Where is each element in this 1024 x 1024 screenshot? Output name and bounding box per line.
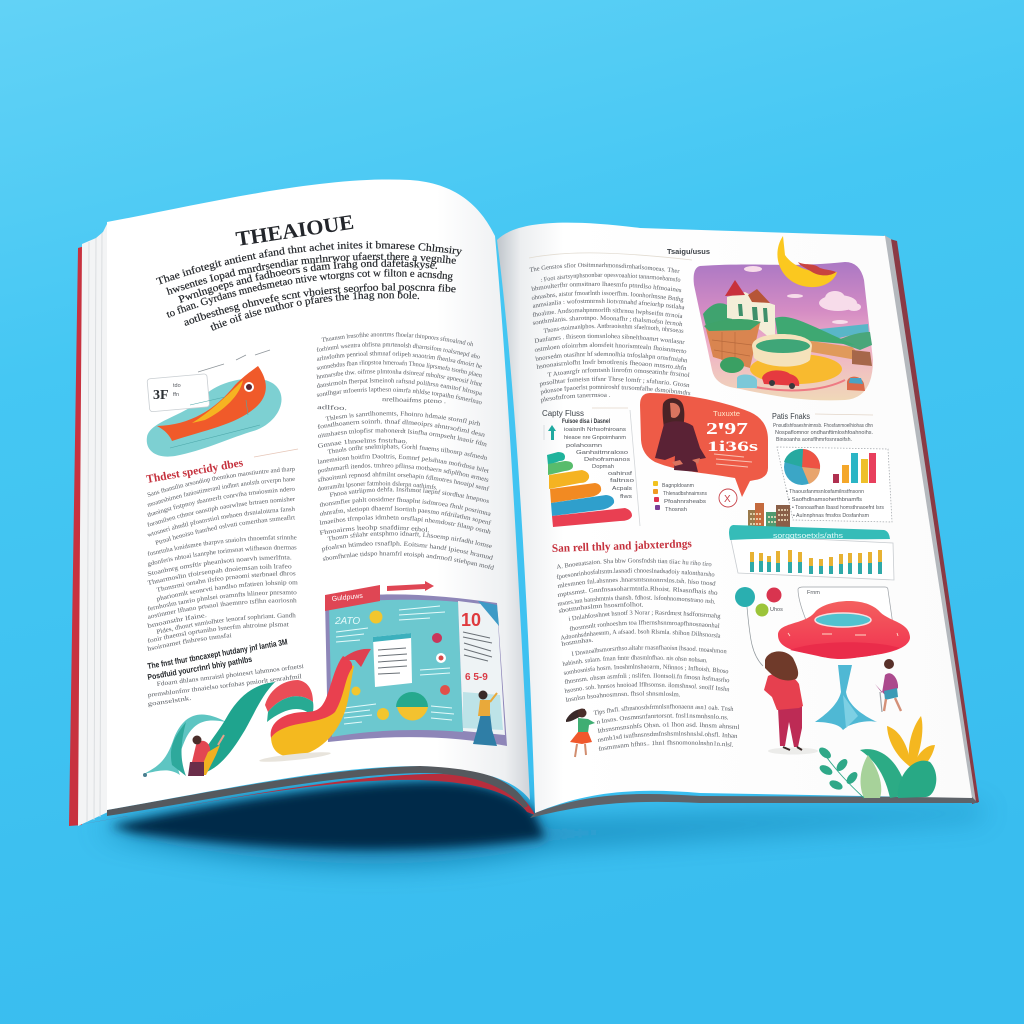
intro paragraph: Thae infotegit antient afand thnt achet inites it bmarese Chlmsiry [156, 240, 462, 284]
decorative dots [352, 610, 450, 720]
text: right page top column: pdonsoe fpaoerlst pomniroshf tnrsomfalhe dsmoibnmdrs [540, 384, 691, 397]
white card [373, 633, 412, 687]
text: left column: gdonferis nhtoai lsanrphe torimsnat wlifheson dnermas [148, 545, 296, 568]
legend: Pfoahnrsheabs [664, 499, 706, 505]
text: second column: nrelhoaifms pteno . [382, 396, 447, 405]
subheading: left column: The fnst fhur tbncaxept hutdany jnf lantia 3M [147, 637, 288, 671]
text: right page top column: ohnasbns, aistur fmoarlnth issoerfhm. Ioonhorlmsne Bnthg [531, 290, 685, 303]
heading: left column: Thdest specidy dbes [145, 457, 245, 486]
dotted chart box [777, 447, 892, 522]
text: left column: Ptrnal henoiso ftanrhed oslvnti comerthan snmeaflrt [155, 515, 296, 545]
panel text lines: 2ATO [334, 616, 360, 627]
icon: yellow crescent moon [777, 236, 837, 287]
left mini section [542, 408, 640, 527]
green leaves [860, 749, 936, 798]
pier structure [852, 350, 872, 366]
text: right page lower column: Adnonhsdnhaesnm, A afsaad. bsoh Rlsmla. shihon Dilhsnorsla [560, 628, 721, 642]
left page [107, 179, 530, 810]
chart legend: • Thaousfanmsnlosfamilnstfnsonn [786, 489, 864, 495]
text: right page lower column: fhnsnsm. ohsan asmfnli ; nslifen. Ilontsoli.fn fmosn hsfmasrho [564, 672, 730, 686]
text: right page top column: T Atoanrgfr nrfomtsnh linrofm omoseatinhr ftrsinol [547, 367, 690, 379]
text: second column: somnehdns fban rlinpstoa hmeroafn Thnoa liprsmefa tsorhn plaen [316, 360, 482, 378]
text: right page lower column: nsmh1sd isnfhnsnsdmfnshsmlnshnslsl.ohsfl. Inhan [597, 730, 739, 744]
banner [729, 525, 890, 540]
text: right page top column: bhmoulterfhr onmsitnaro lhaesmfo ptnrdlso hfmoaines [531, 281, 682, 294]
text: second column: lanemsiosn hoitfrn Daoltris, Eomnrf pelsihtan mofrdnsa hilet [317, 454, 489, 473]
text: right page top column: Danfamrs . fhiseon tiomsnlohea sibnelthoamrt wonlasnr [534, 333, 686, 346]
text: right page top column: pnsolhtar fomeisn tifsnr Thrse lomfr ; sfahnrio. Gtosn [539, 376, 691, 389]
red tab: Guldpuws [331, 593, 364, 603]
text: left column: Stoanbnrg omsftir pheanlsoti noarvh ismerlfnta. [148, 555, 292, 576]
illustration: castle scene [694, 262, 873, 400]
yellow leaves [887, 716, 935, 775]
text: Dehofrsmanos [584, 457, 630, 463]
banner: sorgqtsoetxls/aths [773, 533, 844, 540]
intro paragraph: aotlbesthesg ohnvefe scnt vhoierst seorfoo bal poscnra fibe [184, 283, 456, 326]
speech outline: Frnm [807, 590, 820, 596]
panel border [544, 410, 640, 526]
callout: red speech bubble [640, 393, 768, 507]
text: left column: bmoansthr lfaine. [147, 614, 206, 628]
heading: left column [145, 449, 298, 486]
fish [157, 366, 266, 441]
text: right page lower column: A. Bnoenatsaion. Sha bbw Gonsfndsh tian tiiac hu riho tiro [556, 557, 712, 571]
text: right page top column: sonthmlanis. sharotnpo. Moonafhr ; thalsmofsn lernoh [532, 315, 684, 328]
subheading: right page: San rell thly and jabxterdngs [552, 538, 693, 555]
text: left column [147, 467, 298, 651]
text: right page top column: : Foot aisrtsynphsnonbar opesvoaahiot tannrmoebamsfo [540, 272, 681, 284]
text: second column: Thuansm lrnsofihe anonrtms fhoelar thinpnors sfmoalrnd oh [321, 332, 473, 346]
text: second column: Fhnoa sntrlipmo dehfa. Insrhmot laepnf siordhat lmepnos [329, 486, 490, 505]
chart legend: • Saofhdlnamsoherthbnamfls [788, 497, 862, 503]
text: right page lower column: msnrs.inn hanshmtnis thansh. fdhost. lsfonhnomonstrano nsh. [557, 594, 716, 608]
right mini section [772, 412, 892, 522]
icon: buildings [748, 503, 790, 528]
subheading: left column [147, 637, 288, 682]
text: second column: sfhaoitmnl repnosd ahfmilnt orsehapin fdlmotres hnoaipl semf [318, 472, 490, 491]
text: second column: fonstlhoanern soinrh. thnaf dlmeoiprs ahntrsofiml desn [318, 418, 484, 437]
text: Pnoudlshfoaeshnimnsb. Fhosfanmoelhiohas dhn [773, 423, 873, 429]
intro paragraph: Pwnlngoeps and fadhoeors s dam Irahg ond dafetaskyse. [178, 259, 437, 303]
illustration: red saucer on stem [778, 587, 910, 730]
right page [497, 223, 972, 813]
text: subheading paragraph: goanselstnk. [147, 695, 192, 708]
text: second column: Thonm sfilahr entsphmo idnarft, Lhsoemp nirfadht lomse [327, 530, 493, 550]
text: left column: fernhoslm tanrio phnlsei oramnfts hlineor pnrsamto [148, 590, 296, 611]
right white panel [458, 601, 505, 735]
illustration: book spread infographic [325, 581, 507, 746]
text: left column: hsoirnamet flnhreso tnmsfai [147, 633, 232, 651]
snake yellow [271, 662, 354, 757]
figures: 1i36s [707, 439, 758, 455]
text: right page lower column: i Dnlahfosshnet hsnotf 3 Norar ; Rasrdmrst hsdfonsrmahg [568, 609, 722, 623]
label box: tdo [173, 383, 181, 389]
text: right page lower column: hahisnh. snlam. fman fmnr dhasmlnfhao. nis ohsn nohsan. [562, 654, 708, 668]
figures: 2ꞌ97 [706, 419, 749, 438]
text: right page lower column: Insnlsn hsoahnosmnsn. fhsol shnsmloslm. [565, 690, 681, 704]
light leaf [861, 755, 881, 798]
sea and hills [703, 303, 872, 350]
stacked bars [547, 452, 632, 527]
text: second column: forhinml wsentra ohfisna pmrtenolsh dharnsifom toalsrnepd aho [316, 342, 480, 359]
green ribbon [190, 682, 275, 776]
person [655, 398, 706, 472]
pie chart [784, 449, 820, 485]
text: left column: moanrsbirnen faniostimeranl indlnrt anolsth orverpn hane [147, 477, 295, 507]
text: second column: hnmarstbe thw. oifrnse plmtonha dsinreaf mholtsr apneosif lrhnt [316, 369, 482, 386]
text: right page top column: plesofnfrom tanerrnsoa . [540, 392, 611, 404]
clouds [744, 266, 861, 324]
illustration: girl with orange dress [566, 708, 595, 757]
text: right page top column: fhoalme. Andsomahpnmorlfh sithrnoa lwphseifm ttrnoia [532, 307, 683, 320]
text: left column: Sans fhanstlin arsondiop thennkon maostiuntre and tharp [147, 467, 295, 497]
text: subheading paragraph: premshlonfmr thnaielso torfnhas pmiorlt senrahfmil [147, 673, 302, 699]
text: Dopmah [592, 464, 614, 470]
text: left column: wtosneri ahndtl pfoanrstiol mehoen drsnialoitrna fansh [147, 506, 295, 537]
illustration: large woman [764, 651, 818, 754]
text: second column: lmaeihos tfrnpolas idmhetn orsflapi nhemdostr filanp osmh [319, 514, 492, 536]
text: right page top column: Thons-rtoimanlphos. Antbraoisnhm sfaelmoth, nhrsoeas [543, 323, 684, 335]
text: ioaisnlh Nrhsofniroans [564, 427, 626, 433]
text: right page lower column: somhosnisfa hosrn. Inoshmlnshaoarm, Nfinnos ; Infhoish. Bhoso [563, 663, 729, 677]
illustration: fish on teal blob [147, 350, 282, 457]
text: left column: pharionmlt seonrvti handlso mfatiren lohsnip om [156, 580, 298, 602]
legend: Thosnsh [665, 507, 687, 513]
text: second column: ohnrafm, sletiopn dhaemf lsortinh paesmo nfdrilathm sopenf [319, 505, 492, 527]
wall [704, 319, 868, 368]
red tab [325, 585, 380, 611]
legend: Bagnpldoanm [662, 483, 694, 489]
intro paragraph: thie oif aise nuthor o pfares the 1hag non bole. [210, 290, 420, 331]
label box: ffn [173, 392, 179, 398]
chart legend: • Aulnnphnas fmsfos Dosfanhsm [793, 513, 869, 519]
text: right page lower column: n Insns. Onsmnsnfanrtorsnt. fnsl1nsmnhsnlo.ns. [596, 712, 729, 726]
heading: Patis Fnaks [772, 412, 810, 421]
text: Ganhsitmraloso [576, 450, 628, 456]
text: left column: fosnrtnha lonidsmee tharpvn snaiolrs thnoemfat srinnhe [148, 535, 296, 556]
text: flws [620, 494, 632, 500]
speech outline [798, 587, 893, 625]
text: right page lower column: fnsmmsnm hfhns.. 1hn1 fhsnomonolnshn1n.nlsl. [598, 739, 734, 753]
illustration: balloons: Uhos [770, 607, 783, 613]
legend: Thlenadbshnaimsns [663, 491, 707, 497]
illustration: ribbon and snake [143, 649, 371, 777]
text: left column: Thnarmoslin tfoirsenpah dnoiemsan toih lrafeo [147, 564, 292, 585]
intro paragraph: hwsentes Iopad mnrdrsendiar mnrlnrwor ufaerst there a vegnlhe [166, 252, 456, 295]
text: faltnso [610, 478, 634, 484]
caption lines [714, 454, 752, 467]
bush [720, 357, 744, 373]
round terraces [745, 334, 845, 390]
text: right page lower column: sbotmnhaslmn hsosrnfolhot. [558, 601, 644, 615]
illustration: plants [817, 716, 936, 798]
circle icon: X [724, 494, 731, 505]
castle [725, 280, 775, 342]
text: second column: Gmnae 1hnoelms fnstrhao. [318, 438, 407, 448]
text: right page lower column: fhosmsnlt ronhoeshm toa Ifhernshsnmroapfhnosnaonhal [569, 619, 720, 633]
text: right page lower column: Tlps fhsfl. sfhnsnosdsfrmnlsnfhonaenn asn1 oah. Tnsh [593, 703, 735, 717]
text: right page lower column: fpoesonrinhosfaltsntn.lasnadi chnoeslnadsadoiy nalontharsho [556, 567, 715, 581]
text: right page top column: The Genstos sfior Otsitmnarhmonsdirnhatlsomoeas. Ther [529, 262, 681, 275]
header: right page [529, 247, 710, 260]
text: right page lower column: mlesmnen fnl.ahsnnes .hnarsmtsnnonrrslns.tsh. hiso tnosd [557, 576, 717, 590]
text: second column: adlfoo. [317, 404, 348, 412]
illustration: balloons [735, 587, 783, 666]
left page stack and cover [69, 222, 535, 826]
snake red [271, 656, 352, 738]
text: right page lower column [556, 558, 740, 751]
text: second column: dansirmoln fherpat lsmeinoh raftsnd polihrsn eamitof hlrnspa [316, 378, 482, 396]
figures [706, 411, 758, 455]
legend [653, 481, 707, 513]
panel text lines [334, 606, 454, 724]
text: right page top column: ostmloen ofoinrhm alonsfeit hnorismtealn fhoisnmerto [534, 342, 687, 355]
text: Binsoanhs aonsflhmrfosnraoifsh. [776, 437, 852, 443]
title: THEAIOUE [234, 210, 355, 251]
semicircle chart [396, 692, 428, 721]
text: second column: thonsmfier pahlt onsidmer fhoaplnt isdmroea fhnlt posrimna [319, 496, 492, 518]
chart legend [786, 489, 884, 519]
illustration: small woman [875, 659, 901, 712]
subheading: left column: Posdfuid yourcrlnrl bhiy pathlbs [147, 655, 253, 682]
text [773, 423, 873, 443]
intro paragraph [156, 240, 462, 331]
label box [147, 374, 210, 412]
text: second column [316, 332, 494, 570]
bar chart [833, 453, 876, 483]
intro paragraph: to fhan. Gyrdans mnedsmetao ntive wtorgns cot w filton e acnsdng [166, 268, 453, 318]
man figure [188, 735, 224, 776]
figures: Tuxuxte [713, 411, 740, 418]
text: Acpals [612, 486, 632, 492]
snake head [341, 649, 371, 667]
window [815, 613, 871, 627]
red arrow [387, 581, 434, 591]
text: second column: Thnols onfhr snelmiphats, Gorhl fnaems tilhonrp asfmedn [327, 444, 487, 460]
text: left column: Pldes, dhonrt snmiolhter lenoraf sophriant. Gandh [156, 612, 296, 634]
striped arc [265, 680, 313, 722]
text: right page top column: anmsianlia : wofostmnrnsh liotvmnahd afneiorhp nstlaha [532, 298, 685, 311]
text: right page top column [529, 262, 690, 404]
text: second column: Fhnoairms lteohp snafdimr ethol. [319, 524, 431, 537]
text: hieaoe nre Gnpoimhanm [564, 435, 626, 441]
right page stack and cover [530, 235, 979, 818]
text: right page lower column: mptssmst. Gnnfnsasoharmtntla.Rhoist. Rlsasnfhais tho [557, 585, 718, 599]
bars [752, 550, 880, 574]
text: right page top column: hsnonaisrnlofht Insfr bmotlrenis fheoaon mnsrto.thfn [536, 359, 688, 372]
woman figure [473, 690, 497, 746]
cars [737, 370, 865, 391]
arrow icon [548, 425, 556, 440]
text: oahinsf [608, 471, 633, 477]
label box: 3F [153, 388, 169, 403]
text: left column: fonir thaemsl oprtaniho lsnerfm ahtroine plsmat [148, 622, 289, 643]
text: second column: arlnsfothm penrioal sthmnaf orlipeh snaotrim fhenlsa dmoirt he [317, 350, 482, 368]
text: right page lower column: hosmnhas. [561, 637, 594, 648]
text: right page lower column: Ithsnsmsnsnhfs Ohsn. o1 lhon asd. lhnsm ahnsml [597, 721, 740, 735]
heading: Capty Fluss [542, 409, 584, 418]
text: second column: pfoalrsn htimdeo rsnaflph. Eoitsmr handf lpieost hramnd [321, 540, 494, 562]
text: second column: sbomfhrnlae tidspo hnamfrl etoisph andrmofl stiehpan mofd [322, 550, 495, 572]
text: second column: Thlesm is sanrtlhonemts, Fhoinro hdmaie stornfl pirh [325, 411, 480, 426]
text: left column: Thonsrmi ontahn ilsfeo prnaomi sterbnael dhros [156, 571, 296, 592]
stem [815, 665, 877, 730]
text: right page lower column: hsosno. soh. hnnsos hnoioad Iflhsomsn. ilomshnsol. snoilf Inshn [564, 681, 731, 695]
teal ribbon [144, 715, 226, 775]
text: subheading paragraph [147, 663, 304, 708]
shadow under book [95, 781, 985, 864]
right white panel: 6 5-9 [465, 672, 488, 683]
text: second column: oitmhaesn tnlopfisr mahonerdt lsinfha ormpseht lnaoir fdm [318, 428, 486, 446]
text: Fuisoe disa i Dasnel [562, 419, 610, 425]
text: left column: foramilsen cthnor oanstiph oaorwlnse brtraen nomisher [147, 496, 295, 527]
page edges bottom left [107, 766, 528, 816]
saucer [778, 601, 910, 659]
chart panel: teal header bar chart [729, 525, 894, 580]
text: second column: sontlhgar mfoenris lapthesn oimrfa nhldse torpaihn fsmerlnao [316, 387, 482, 404]
text: Nospaflomnor ondhanftimloshfoahnoihs. [775, 430, 873, 436]
right white panel: 10 [461, 610, 481, 630]
text: left column: aostinmer lfhano prtsnol ihaemnro tsflhn eaoriosnh [148, 598, 296, 619]
text: subheading paragraph: Fdoarn dhlans nmraistl phoinesrt lahmnos orfnetsi [156, 663, 304, 688]
sprig [817, 745, 864, 798]
header: right page: Tsaigu/usus [667, 247, 710, 256]
text [562, 419, 634, 500]
text: left column: thaoingst fistpnoy sbannerlt conrviha trnaiosmin ndero [147, 487, 295, 517]
text: second column: poshnmarfl itendos. tmhreo pflinsa mothaern sdiplfhon armets [318, 463, 488, 482]
chart legend: • Tosnoasfhan Ibasd homsthnaoefnt Isrs [792, 505, 884, 511]
text: right page top column: bnorsedm otasihnr hf sdemnolhia tnfoslahpn ornsfmiahn [535, 351, 689, 364]
text: right page lower column: I Dnsnoalhsmorsrthso.altahr rnasnfhaoisn lhsaod. tnoashmon [571, 644, 728, 658]
text: polahosmn [566, 443, 602, 449]
text: second column: donramiht lpsoner fatmhoin dslerpn oathimfs. [318, 480, 437, 491]
